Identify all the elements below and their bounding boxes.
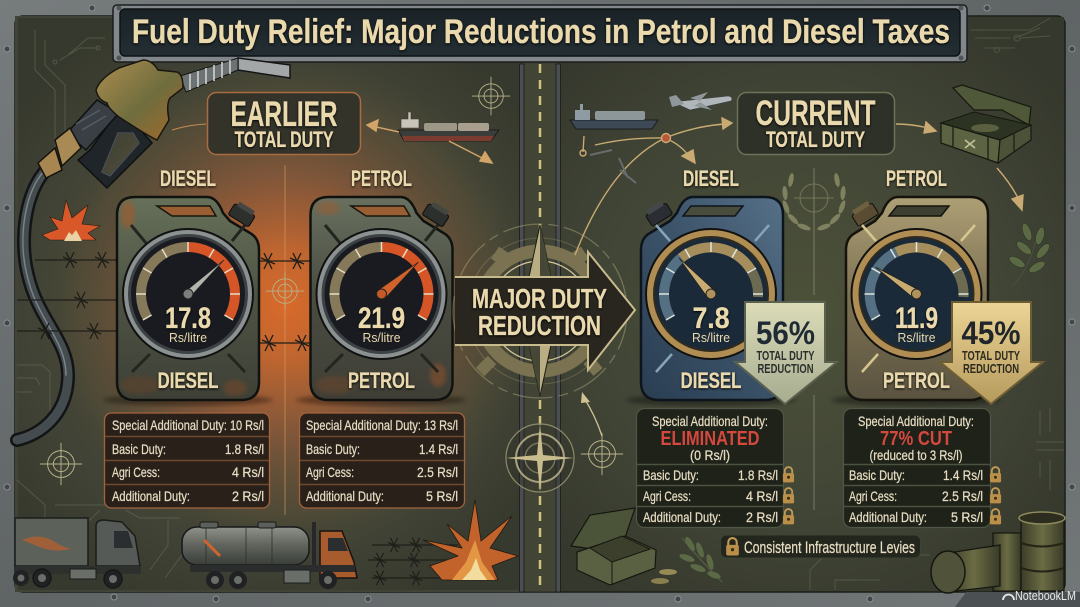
table: current diesel duties: ELIMINATED <box>660 428 760 450</box>
crosshair: top centre-left <box>472 77 510 115</box>
icon: box truck <box>13 518 141 588</box>
callout: 56% reduction arrow: 56% <box>756 315 815 351</box>
jerrycan: current petrol <box>831 197 1001 406</box>
icon: ship right <box>570 104 658 129</box>
label: petrol earlier: PETROL <box>351 166 412 191</box>
jerrycan: current diesel: 7.8 <box>692 302 730 335</box>
table: earlier diesel duties: Special Additional Duty: 10 Rs/l <box>112 417 264 433</box>
table: current petrol duties: Special Additional Duty: <box>858 413 974 429</box>
crosshair: centre-left <box>266 272 304 310</box>
jerrycan: current diesel <box>626 197 796 406</box>
title plate <box>113 5 967 62</box>
current heading box: TOTAL DUTY <box>766 127 865 152</box>
route arrows right <box>575 118 732 255</box>
callout: 56% reduction arrow: REDUCTION <box>758 361 814 376</box>
gauge <box>852 229 982 359</box>
table: earlier diesel duties <box>104 413 270 508</box>
table: current petrol duties: Basic Duty: <box>849 467 905 483</box>
table: current petrol duties: Additional Duty: <box>849 509 927 525</box>
table: current petrol duties: 77% CUT <box>880 428 952 450</box>
earlier heading box: TOTAL DUTY <box>234 127 334 152</box>
icon: oil barrels <box>931 512 1065 593</box>
callout: 56% reduction arrow <box>735 302 837 404</box>
table: earlier diesel duties: 2 Rs/l <box>232 488 264 504</box>
note: consistent infrastructure levies <box>720 535 920 558</box>
table: current petrol duties: 2.5 Rs/l <box>942 488 983 504</box>
table: earlier petrol duties: 5 Rs/l <box>426 488 458 504</box>
compass star <box>529 225 551 396</box>
gauge <box>316 229 446 359</box>
table: current petrol duties: Agri Cess: <box>849 488 897 504</box>
label: petrol current: PETROL <box>886 166 947 191</box>
table: current diesel duties: Additional Duty: <box>643 509 721 525</box>
icon: airplane <box>669 92 732 110</box>
table: current diesel duties: (0 Rs/l) <box>690 447 730 463</box>
callout: 56% reduction arrow: TOTAL DUTY <box>756 348 815 363</box>
jerrycan: earlier petrol: PETROL <box>348 368 415 393</box>
icon: ship left <box>398 112 499 141</box>
arrow: major duty reduction: MAJOR DUTY <box>472 283 607 314</box>
icon: olive sprig bottom <box>678 536 722 582</box>
table: earlier diesel duties: 4 Rs/l <box>232 464 264 480</box>
arrow: major duty reduction <box>455 252 635 370</box>
table: earlier petrol duties: Basic Duty: <box>306 441 360 457</box>
jerrycan: current diesel: DIESEL <box>680 368 742 393</box>
gear and compass ring behind arrow <box>453 224 627 398</box>
barbed wire: bottom <box>368 538 470 585</box>
table: current diesel duties: 4 Rs/l <box>746 488 778 504</box>
table: current diesel duties: 1.8 Rs/l <box>738 467 778 483</box>
jerrycan: earlier petrol <box>296 197 466 406</box>
arrows near ship left <box>367 120 492 163</box>
jerrycan: earlier petrol: Rs/litre <box>362 330 400 345</box>
table: current petrol duties: 1.4 Rs/l <box>943 467 983 483</box>
icon: laurel wreath with crosshair <box>781 173 847 232</box>
NotebookLM badge <box>955 588 1080 607</box>
jerrycan: earlier diesel: 17.8 <box>165 302 211 335</box>
table: earlier diesel duties: Basic Duty: <box>112 441 166 457</box>
callout: 45% reduction arrow: TOTAL DUTY <box>962 348 1020 363</box>
earlier heading box: EARLIER <box>230 95 338 134</box>
table: earlier petrol duties: 1.4 Rs/l <box>419 441 458 457</box>
current heading box: CURRENT <box>756 94 876 133</box>
arrow to ammo box <box>896 122 1023 210</box>
current heading box <box>738 92 894 154</box>
earlier heading box <box>172 92 360 154</box>
jerrycan: current petrol: Rs/litre <box>898 330 936 345</box>
label: diesel earlier: DIESEL <box>160 166 216 191</box>
icon: ammo box bottom <box>571 508 677 585</box>
circuit decoration: left <box>17 30 182 578</box>
icon: explosion left <box>42 200 100 241</box>
jerrycan: current diesel: Rs/litre <box>692 330 730 345</box>
table: earlier petrol duties: Special Additional Duty: 13 Rs/l <box>306 417 458 433</box>
table: current diesel duties: Special Additional Duty: <box>652 413 768 429</box>
table: earlier petrol duties <box>300 413 464 508</box>
centre road divider <box>520 64 560 592</box>
table: current petrol duties: 5 Rs/l <box>951 509 983 525</box>
icon: olive sprig right <box>1007 222 1052 287</box>
jerrycan: earlier diesel: Rs/litre <box>169 330 207 345</box>
jerrycan: current petrol: 11.9 <box>895 302 938 335</box>
table: earlier petrol duties: Agri Cess: <box>306 464 354 480</box>
gauge <box>646 229 776 359</box>
callout: 45% reduction arrow: 45% <box>962 315 1020 351</box>
label: diesel current: DIESEL <box>683 166 739 191</box>
table: earlier petrol duties: 2.5 Rs/l <box>417 464 458 480</box>
table: earlier petrol duties: Additional Duty: <box>306 488 384 504</box>
table: current petrol duties: (reduced to 3 Rs/l) <box>870 447 962 463</box>
jerrycan: current petrol: PETROL <box>883 368 950 393</box>
table: current diesel duties: Basic Duty: <box>643 467 699 483</box>
hose <box>17 168 68 440</box>
table: earlier diesel duties: 1.8 Rs/l <box>225 441 264 457</box>
table: current diesel duties <box>636 408 794 528</box>
table: current diesel duties: 2 Rs/l <box>746 509 778 525</box>
icon: explosion large <box>423 500 518 580</box>
jerrycan: earlier petrol: 21.9 <box>358 302 405 335</box>
jerrycan: earlier diesel <box>103 197 273 406</box>
table: earlier diesel duties: Agri Cess: <box>112 464 160 480</box>
note: consistent infrastructure levies: Consistent Infrastructure Levies <box>744 538 915 557</box>
icon: fuel nozzle <box>38 58 290 188</box>
crosshair: lower left <box>40 443 82 485</box>
callout: 45% reduction arrow <box>940 302 1043 404</box>
callout: 45% reduction arrow: REDUCTION <box>963 361 1019 376</box>
table: current diesel duties: Agri Cess: <box>643 488 691 504</box>
barbed wire: left <box>17 252 310 351</box>
icon: fuel tanker truck <box>182 522 357 589</box>
icon: ammo box top right <box>941 85 1031 163</box>
vertical guide lines <box>285 165 814 515</box>
icon: compass rose <box>506 424 574 492</box>
arrow: major duty reduction: REDUCTION <box>478 310 601 341</box>
crosshair and arrow near compass <box>581 392 623 475</box>
table: earlier diesel duties: Additional Duty: <box>112 488 190 504</box>
table: current petrol duties <box>844 408 1001 528</box>
jerrycan: earlier diesel: DIESEL <box>158 368 218 393</box>
circuit decoration: right <box>810 18 1064 590</box>
gauge <box>123 229 253 359</box>
